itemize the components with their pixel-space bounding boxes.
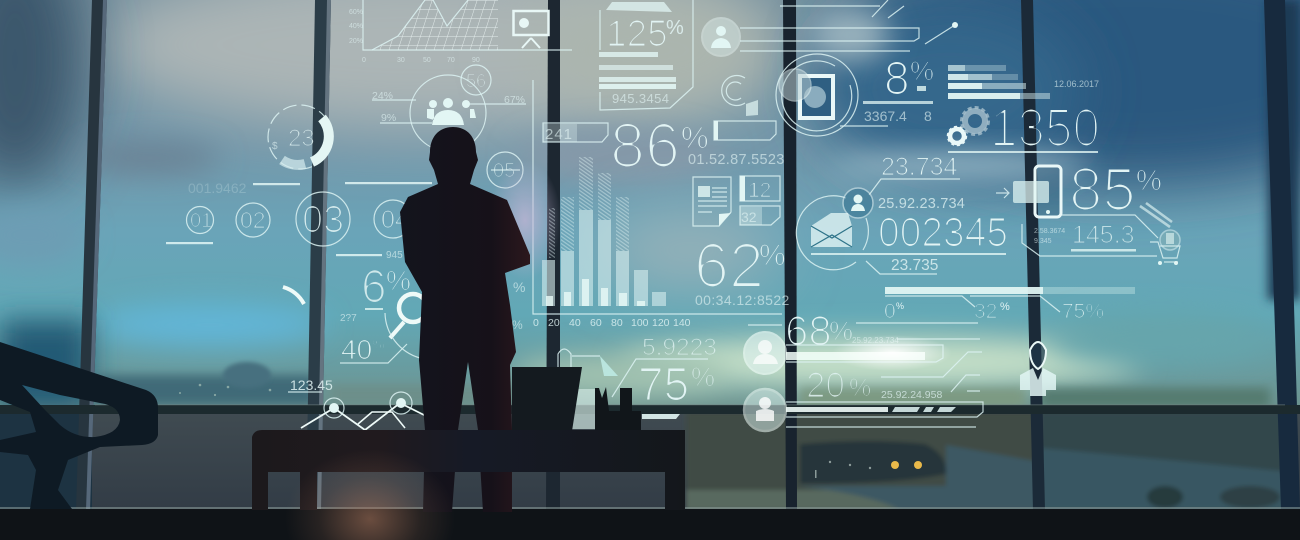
6 percent and magnifier: % <box>513 279 525 295</box>
glare on progress bar <box>832 335 952 371</box>
icon: gears with 1350: 1350 <box>990 98 1100 158</box>
line chart with nodes bottom left <box>288 377 430 430</box>
line chart with nodes bottom left: 123.45 <box>290 377 333 393</box>
email block with 002345: 23.734 <box>881 153 958 181</box>
86 percent figure: 86 <box>610 111 680 181</box>
donut gauge 23: $ <box>272 141 278 152</box>
progress bar with 0, 32 and 75 percent: 0 <box>884 300 896 323</box>
people group with percentages: 67% <box>504 94 525 106</box>
bar chart: 20 <box>548 317 560 329</box>
68 percent with user bar: 68 <box>785 307 832 354</box>
icon: phone with 85 percent and cart: % <box>1136 165 1162 197</box>
area chart top left: 50 <box>423 57 431 64</box>
document with 125%: 945.3454 <box>612 91 669 106</box>
area chart top left: 90 <box>472 57 480 64</box>
6 percent and magnifier: % <box>512 318 523 332</box>
stacked progress bars <box>948 65 1099 99</box>
75 percent with paper clip <box>558 334 717 429</box>
progress bar with 0, 32 and 75 percent: 75% <box>1062 300 1104 323</box>
bar chart: 140 <box>673 317 691 329</box>
purple reflection beside figure <box>489 160 561 280</box>
8 percent figure <box>840 52 934 126</box>
left circle numbers 01 to 04: 03 <box>302 199 344 241</box>
document and number tiles: 32 <box>741 209 757 225</box>
6 percent and magnifier <box>340 250 525 365</box>
bar chart: 0 <box>533 317 539 329</box>
email block with 002345: 23.735 <box>891 257 938 274</box>
6 percent and magnifier: % <box>372 336 384 352</box>
donut gauge 23: 23 <box>288 125 315 152</box>
left circle numbers 01 to 04: 01 <box>190 210 212 232</box>
data overlay <box>166 0 1180 431</box>
people group with percentages <box>372 65 526 151</box>
silhouette of man <box>400 127 530 512</box>
62 percent figure: 62 <box>694 231 764 301</box>
icon: user circle with connector lines <box>702 0 958 56</box>
area chart top left: 60% <box>349 9 363 16</box>
icon: partial ring <box>722 76 758 116</box>
document and number tiles <box>693 176 780 226</box>
area chart top left <box>349 0 572 64</box>
progress bar with 0, 32 and 75 percent: % <box>896 301 904 311</box>
6 percent and magnifier: 2?7 <box>340 313 357 324</box>
icon: phone with 85 percent and cart: 85 <box>1069 156 1136 223</box>
8 percent figure: 8 <box>884 52 910 104</box>
20 percent with user bar <box>744 366 983 431</box>
6 percent and magnifier: 945 <box>386 250 403 261</box>
86 percent figure <box>610 111 785 181</box>
email block with 002345: 002345 <box>878 209 1008 255</box>
icon: phone with 85 percent and cart: 145.3 <box>1072 221 1135 249</box>
icon: phone with 85 percent and cart: 2.58.3674 <box>1034 228 1065 235</box>
label bar 241 <box>543 123 608 143</box>
left circle numbers 01 to 04: 001.9462 <box>188 180 247 196</box>
stacked progress bars: 12.06.2017 <box>1054 79 1099 89</box>
68 percent with user bar <box>744 307 982 392</box>
circle 05 <box>487 152 523 188</box>
62 percent figure: 00:34.12:8522 <box>695 292 790 308</box>
86 percent figure: 01.52.87.5523 <box>688 152 785 168</box>
68 percent with user bar: 25.92.23.734 <box>852 336 899 345</box>
people group with percentages: 24% <box>372 90 393 102</box>
sky background <box>0 0 1300 420</box>
bar chart: 60 <box>590 317 602 329</box>
document and number tiles: 12 <box>748 179 771 202</box>
8 percent figure: 3367.4 <box>864 108 907 124</box>
icon: gears with 1350 <box>948 98 1100 158</box>
bar chart <box>533 80 782 329</box>
icon: phone with 85 percent and cart: 9.345 <box>1034 238 1052 245</box>
area chart top left: 70 <box>447 57 455 64</box>
icon: projector screen <box>514 11 548 48</box>
icon: businessman outline <box>1020 342 1056 396</box>
20 percent with user bar: 20 <box>806 366 845 405</box>
email block with 002345: 25.92.23.734 <box>878 196 965 212</box>
email block with 002345 <box>796 153 1008 274</box>
left circle numbers 01 to 04: 04 <box>381 206 409 234</box>
document with 125%: % <box>666 17 684 39</box>
progress bar with 0, 32 and 75 percent: 32 <box>974 300 997 323</box>
floor lens flare <box>285 400 455 540</box>
20 percent with user bar: 25.92.24.958 <box>881 389 942 401</box>
chair silhouette <box>0 342 158 509</box>
label bar 241: 241 <box>545 126 573 143</box>
86 percent figure: % <box>681 120 709 155</box>
bar chart: 100 <box>631 317 649 329</box>
6 percent and magnifier: 6 <box>361 260 387 312</box>
75 percent with paper clip: 5.9223 <box>642 334 717 361</box>
20 percent with user bar: % <box>849 374 871 402</box>
8 percent figure: % <box>910 56 934 86</box>
left circle numbers 01 to 04: 02 <box>240 207 266 233</box>
68 percent with user bar: % <box>829 316 853 346</box>
area chart top left: 30 <box>397 57 405 64</box>
bar chart: 40 <box>569 317 581 329</box>
icon: tablet in rings <box>776 54 858 136</box>
left circle numbers 01 to 04 <box>166 180 432 256</box>
progress bar with 0, 32 and 75 percent: % <box>1000 301 1010 313</box>
arc fragment <box>283 287 304 304</box>
75 percent with paper clip: 75 <box>638 358 689 410</box>
62 percent figure: % <box>759 239 786 272</box>
75 percent with paper clip: % <box>691 362 715 392</box>
progress bar with 0, 32 and 75 percent <box>856 287 1135 339</box>
area chart top left: 0 <box>362 57 366 64</box>
people group with percentages: 9% <box>381 112 396 124</box>
area chart top left: 20% <box>349 38 363 45</box>
area chart top left: 40% <box>349 23 363 30</box>
document with 125%: 125 <box>606 13 668 54</box>
8 percent figure: 8 <box>924 108 932 124</box>
6 percent and magnifier: 40 <box>341 334 372 365</box>
landscape seen through lower panes <box>0 405 1300 510</box>
people group with percentages: 56 <box>466 71 486 91</box>
bar chart: 120 <box>652 317 670 329</box>
62 percent figure <box>694 231 790 308</box>
circle 05: 05 <box>493 160 515 182</box>
desk with laptop and pencil cup <box>252 367 685 510</box>
6 percent and magnifier: % <box>386 265 411 296</box>
donut gauge 23 <box>268 105 332 169</box>
document with 125% <box>599 0 693 110</box>
bar chart: 80 <box>611 317 623 329</box>
icon: phone with 85 percent and cart <box>996 156 1180 265</box>
